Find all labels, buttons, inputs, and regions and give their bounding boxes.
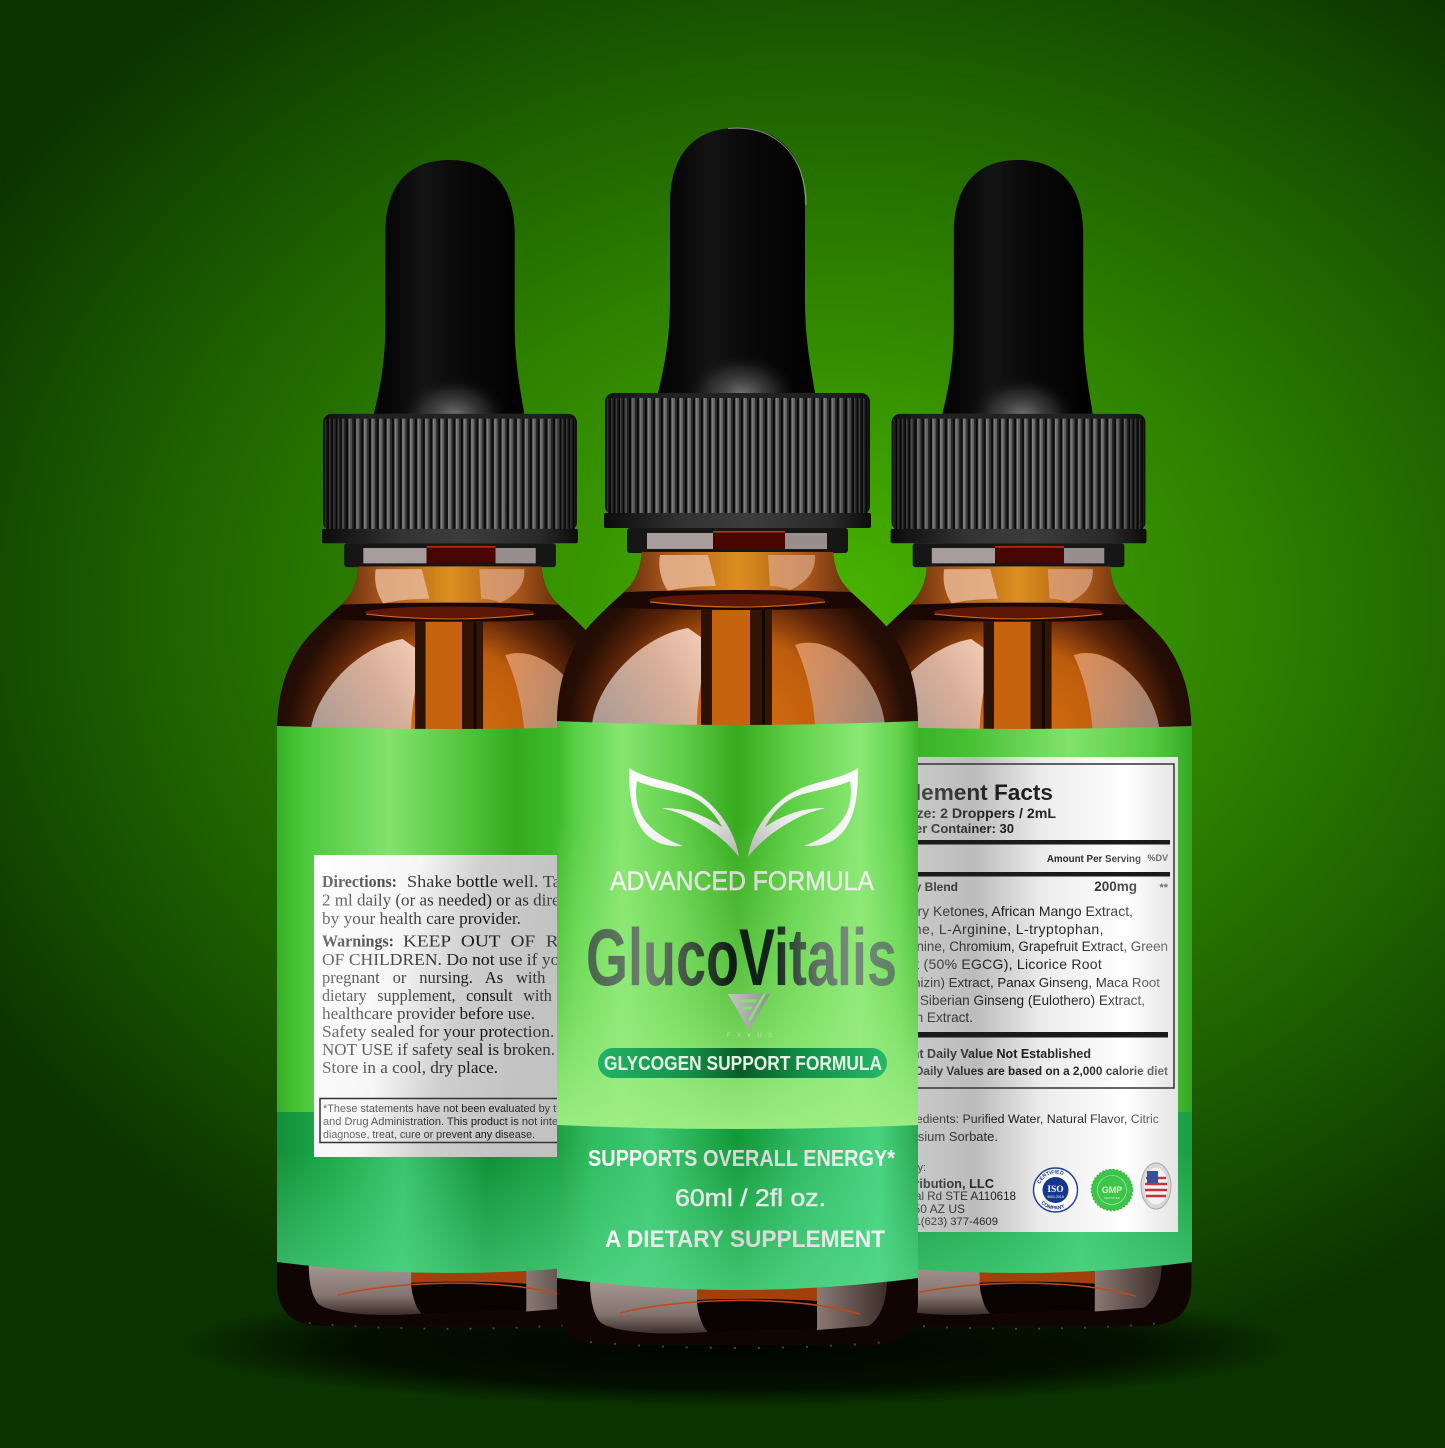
icon: ISO badge: ISO [1047,1185,1064,1195]
right panel: supplement facts: Serving Size: 2 Droppers / 2mL [847,806,1056,822]
ingredient list: L-Theanine, Chromium, Grapefruit Extract, Green [874,939,1168,954]
right bottle: dropper and amber glass [839,160,1198,1331]
icon: GMP badge: GMP [1102,1185,1122,1195]
advanced formula tagline: ADVANCED FORMULA [610,866,874,896]
volume line: 60ml / 2fl oz. [675,1185,826,1212]
left panel: directions and warnings [314,855,611,1157]
right panel: supplement facts: Percent Daily Values are based on a 2,000 calorie diet [868,1064,1168,1078]
glycogen support pill [598,1048,887,1078]
left panel: directions and warnings: healthcare provider before use. [322,1004,535,1023]
right panel: supplement facts: ** [1159,882,1169,894]
right panel: supplement facts: Servings Per Container: 30 [848,821,1014,836]
logo: twin leaves [629,768,858,857]
icon: GMP badge: CERTIFIED [1104,1196,1121,1200]
dietary supplement line: A DIETARY SUPPLEMENT [605,1226,885,1253]
glycogen support pill: GLYCOGEN SUPPORT FORMULA [604,1052,882,1075]
right panel: supplement facts: 200mg [1094,879,1137,894]
left panel: directions and warnings: Shake bottle well. Take [407,872,578,891]
ingredient list [847,903,1168,1025]
right panel: supplement facts: ** Percent Daily Value Not Established [865,1047,1091,1061]
right panel: supplement facts: %DV [1147,853,1168,863]
center bottle: front label [557,715,918,1310]
FDA disclaimer box: *These statements have not been evaluated by the Food [323,1103,596,1115]
left panel: directions and warnings: dietary supplement, consult with your [322,986,592,1005]
center bottle: dropper and amber glass [550,128,925,1350]
distributor address: Goodyear, 85250 AZ US [835,1202,965,1216]
right panel: supplement facts: Other Ingredients: Purified Water, Natural Flavor, Citric [860,1112,1159,1126]
distributor address [824,1162,1016,1228]
icon: ISO badge: COMPANY [1042,1201,1064,1210]
left panel: directions and warnings: NOT USE if safety seal is broken. [322,1040,555,1059]
ingredient list: Tea Extract (50% EGCG), Licorice Root [847,956,1102,972]
FDA disclaimer box: and Drug Administration. This product is not intended to [323,1116,595,1128]
distributor address: 13611 W Chaparral Rd STE A110618 [824,1190,1016,1203]
right panel: supplement facts [824,757,1178,1232]
logo: FV triangle [727,994,772,1039]
distributor address: Distributed by: [856,1162,926,1174]
left panel: directions and warnings: 2 ml daily (or as needed) or as directed [322,890,588,910]
right panel: supplement facts: Proprietary Blend [857,880,958,894]
ingredient list: Green Bean Extract. [850,1010,973,1025]
right panel: supplement facts: Supplement Facts [858,780,1053,805]
left panel: directions and warnings: OF CHILDREN. Do not use if you are [322,950,594,969]
right bottle: label [824,726,1192,1273]
ingredient list: Extract, Siberian Ginseng (Eulothero) Extract, [870,993,1145,1008]
floor shadow [177,1283,1297,1407]
left panel: directions and warnings: by your health care provider. [322,909,521,928]
left panel: directions and warnings: Warnings: [322,932,394,950]
icon: ISO badge [1032,1167,1078,1213]
left bottle: label [277,726,557,1273]
distributor address: FYVUS Distribution, LLC [844,1176,994,1191]
ingredient list: Caffeine, L-Arginine, L-tryptophan, [875,921,1104,937]
FDA disclaimer box [320,1098,596,1142]
product name: GlucoVitalis [586,913,897,1003]
icon: ISO badge: CERTIFIED [1037,1170,1064,1184]
right panel: supplement facts: Amount Per Serving [1047,854,1141,865]
left panel: directions and warnings: KEEP OUT OF REACH [403,932,611,950]
logo: FV triangle: FYVUS [727,1033,772,1039]
left bottle: dropper and amber glass [270,160,630,1331]
ingredient list: (Glycyrrhizin) Extract, Panax Ginseng, Maca Root [867,975,1160,990]
supports overall energy line: SUPPORTS OVERALL ENERGY* [588,1145,896,1171]
left panel: directions and warnings: pregnant or nursing. As with any [322,968,582,987]
right panel: supplement facts: Acid, Potassium Sorbate. [852,1129,998,1144]
ingredient list: Raspberry Ketones, African Mango Extract, [865,903,1133,919]
left panel: directions and warnings: Safety sealed for your protection. Do [322,1022,580,1041]
FDA disclaimer box: diagnose, treat, cure or prevent any disease. [323,1129,535,1141]
left panel: directions and warnings: Directions: [322,872,397,891]
icon: GMP badge [1092,1170,1132,1210]
icon: ISO badge: 9001:2015 [1047,1195,1064,1199]
distributor address: Phone: +1(623) 377-4609 [869,1216,998,1228]
icon: USA flag badge [1141,1163,1171,1209]
left panel: directions and warnings: Store in a cool, dry place. [322,1058,498,1077]
